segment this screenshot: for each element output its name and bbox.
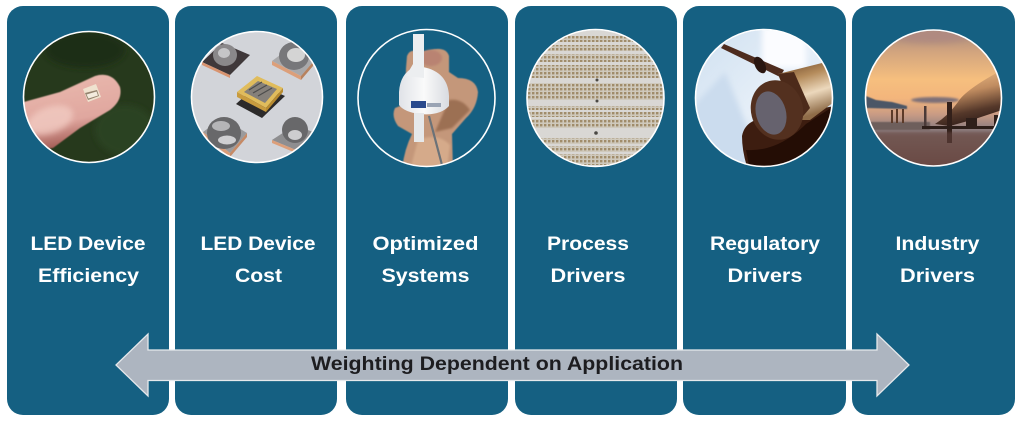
panel: LED Device Cost bbox=[175, 6, 337, 415]
gavel head bbox=[778, 62, 834, 120]
panel: Industry Drivers bbox=[852, 6, 1015, 415]
gavel base bbox=[742, 106, 832, 166]
label: Regulatory bbox=[710, 233, 820, 255]
photo: pipeline at sunset bbox=[865, 29, 1004, 168]
gavel handle bbox=[721, 44, 784, 77]
label: Systems bbox=[382, 265, 470, 287]
label bbox=[547, 233, 629, 287]
photo: LED chip on fingertip bbox=[20, 28, 160, 168]
label: Drivers bbox=[900, 265, 975, 287]
centre package bbox=[236, 76, 285, 118]
panel: Optimized Systems bbox=[346, 6, 508, 415]
label: Efficiency bbox=[38, 265, 139, 287]
arrow: weighting dependent on application: Weighting Dependent on Application bbox=[311, 353, 683, 375]
label: Industry bbox=[896, 233, 980, 255]
label bbox=[710, 233, 820, 287]
photo: gavel bbox=[694, 26, 835, 170]
label: Drivers bbox=[550, 265, 626, 287]
photo: LED packages bbox=[190, 30, 324, 164]
arrow: weighting dependent on application bbox=[116, 334, 909, 396]
label bbox=[200, 233, 316, 287]
label: Optimized bbox=[372, 233, 478, 255]
label: Cost bbox=[235, 265, 283, 287]
panel: Process Drivers bbox=[515, 6, 677, 415]
panel: LED Device Efficiency bbox=[7, 6, 169, 415]
label bbox=[30, 233, 146, 287]
bottom-left package bbox=[203, 117, 247, 157]
bottom-right package bbox=[272, 117, 313, 153]
label: LED Device bbox=[30, 233, 146, 255]
photo: hand holding white lamp bbox=[358, 30, 495, 170]
label bbox=[896, 233, 980, 287]
top-left package bbox=[202, 43, 250, 78]
label: LED Device bbox=[200, 233, 316, 255]
label: Process bbox=[547, 233, 629, 255]
photo: LED wafer array bbox=[525, 28, 666, 169]
label bbox=[372, 233, 478, 287]
top-right package bbox=[272, 42, 313, 80]
label: Drivers bbox=[728, 265, 803, 287]
panel: Regulatory Drivers bbox=[683, 6, 846, 415]
